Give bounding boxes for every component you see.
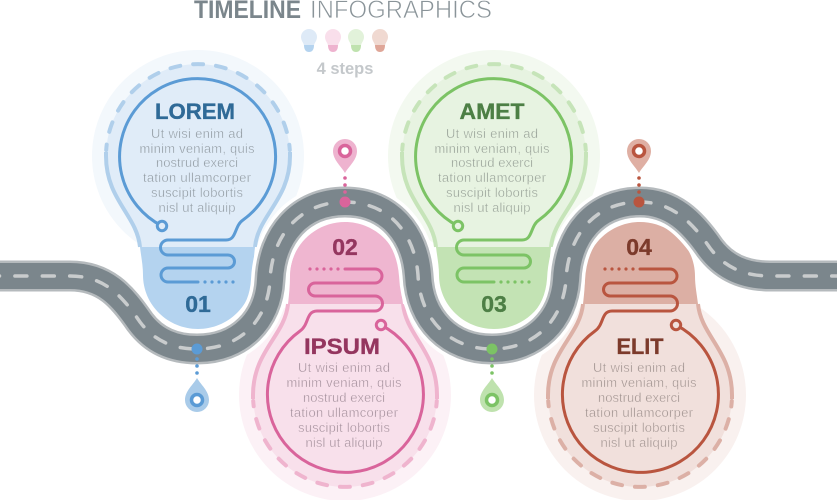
text: step 3: Ut wisi enim ad [446, 126, 538, 141]
text: step 1: 01 [185, 291, 211, 317]
bulb 1 shape: blue [92, 50, 304, 329]
text: step 2: minim veniam, quis [286, 375, 402, 390]
text: step 3: tation ullamcorper [438, 170, 547, 185]
text: step 3: suscipit lobortis [446, 185, 538, 200]
text: step 1: Ut wisi enim ad [151, 126, 243, 141]
text: step 3: 03 [481, 291, 507, 317]
text: step 3 [434, 99, 550, 317]
bulb 2 shape: pink [239, 222, 451, 500]
text: step 4: nisl ut aliquip [600, 435, 678, 450]
marker: pink pin [333, 139, 357, 208]
text: step 1: suscipit lobortis [151, 185, 244, 200]
text: step 2: tation ullamcorper [290, 405, 399, 420]
text: step 1 [140, 99, 255, 317]
text: step 4 [582, 234, 697, 450]
text: step 2: nostrud exerci [303, 390, 385, 405]
text: step 2: nisl ut aliquip [306, 435, 382, 450]
marker: green drop [480, 344, 504, 412]
text: step 2: suscipit lobortis [298, 420, 390, 435]
text: step 1: tation ullamcorper [143, 170, 252, 185]
text: step 1: minim veniam, quis [140, 141, 255, 156]
text: step 2 [286, 234, 402, 450]
text: step 4: Ut wisi enim ad [593, 360, 685, 375]
icon: four mini bulbs [301, 29, 388, 52]
text: step 4: nostrud exerci [598, 390, 680, 405]
text: step 1: LOREM [155, 99, 235, 124]
marker: brown pin [627, 139, 651, 208]
text: step 3: minim veniam, quis [434, 141, 550, 156]
text: step 4: ELIT [616, 334, 664, 359]
text: step 4: minim veniam, quis [582, 375, 697, 390]
title [194, 0, 492, 24]
text: step 3: AMET [460, 99, 525, 124]
text: step 4: tation ullamcorper [585, 405, 694, 420]
text: step 3: nisl ut aliquip [454, 200, 530, 215]
bulb 4 shape: brown [534, 222, 746, 500]
marker: blue drop [185, 344, 209, 412]
text: step 4: suscipit lobortis [593, 420, 686, 435]
winding road [0, 202, 837, 349]
text: step 1: nostrud exerci [156, 155, 238, 170]
bulb 3 shape: green [388, 50, 600, 329]
text: step 2: Ut wisi enim ad [298, 360, 390, 375]
text: step 1: nisl ut aliquip [158, 200, 236, 215]
subtitle: 4 steps: 4 steps [317, 60, 373, 78]
text: step 4: 04 [626, 234, 652, 260]
text: step 3: nostrud exerci [451, 155, 533, 170]
text: step 2: 02 [332, 234, 358, 260]
text: step 2: IPSUM [304, 334, 380, 359]
